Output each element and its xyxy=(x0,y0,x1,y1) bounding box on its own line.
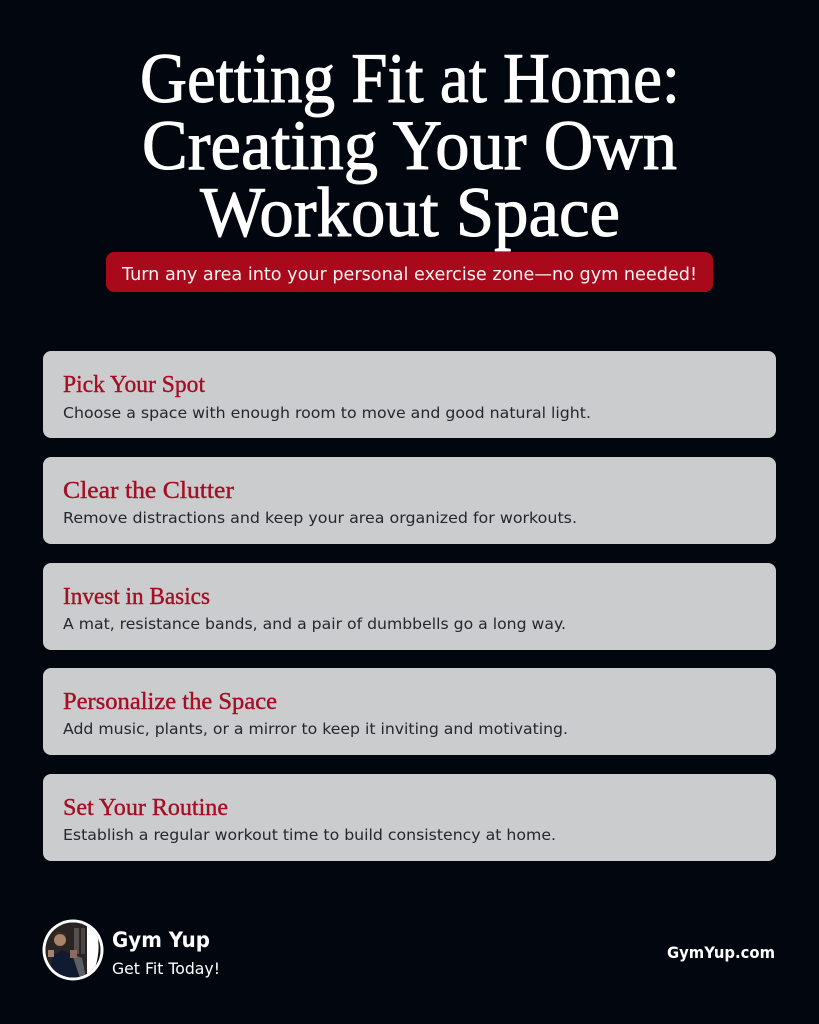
panel: invest in basics xyxy=(43,563,776,650)
brand name: Gym Yup xyxy=(112,928,210,952)
panel: invest in basics: A mat, resistance bands, and a pair of dumbbells go a long way. xyxy=(63,615,566,633)
title xyxy=(140,40,680,252)
panel: set your routine xyxy=(43,774,776,861)
website: GymYup.com xyxy=(667,943,775,962)
panel: clear the clutter xyxy=(43,457,776,544)
icon: avatar xyxy=(42,920,104,980)
panel: pick your spot: Pick Your Spot xyxy=(63,371,205,398)
panel: personalize the space: Personalize the Space xyxy=(63,688,277,715)
title: Workout Space xyxy=(200,174,620,252)
subtitle banner: Turn any area into your personal exercise zone—no gym needed! xyxy=(121,264,697,285)
panel: personalize the space xyxy=(43,668,776,755)
panel: set your routine: Set Your Routine xyxy=(63,794,228,821)
panel: clear the clutter: Clear the Clutter xyxy=(63,477,234,504)
panel: pick your spot: Choose a space with enough room to move and good natural light. xyxy=(63,404,591,422)
title: Creating Your Own xyxy=(142,107,677,185)
subtitle banner xyxy=(106,252,713,292)
panel: invest in basics: Invest in Basics xyxy=(63,583,210,610)
panel: pick your spot xyxy=(43,351,776,438)
panel: clear the clutter: Remove distractions and keep your area organized for workouts. xyxy=(63,509,577,527)
panel: set your routine: Establish a regular workout time to build consistency at home. xyxy=(63,826,556,844)
tagline: Get Fit Today! xyxy=(112,959,220,978)
panel: personalize the space: Add music, plants, or a mirror to keep it inviting and motivating. xyxy=(63,720,568,738)
title: Getting Fit at Home: xyxy=(140,40,680,118)
